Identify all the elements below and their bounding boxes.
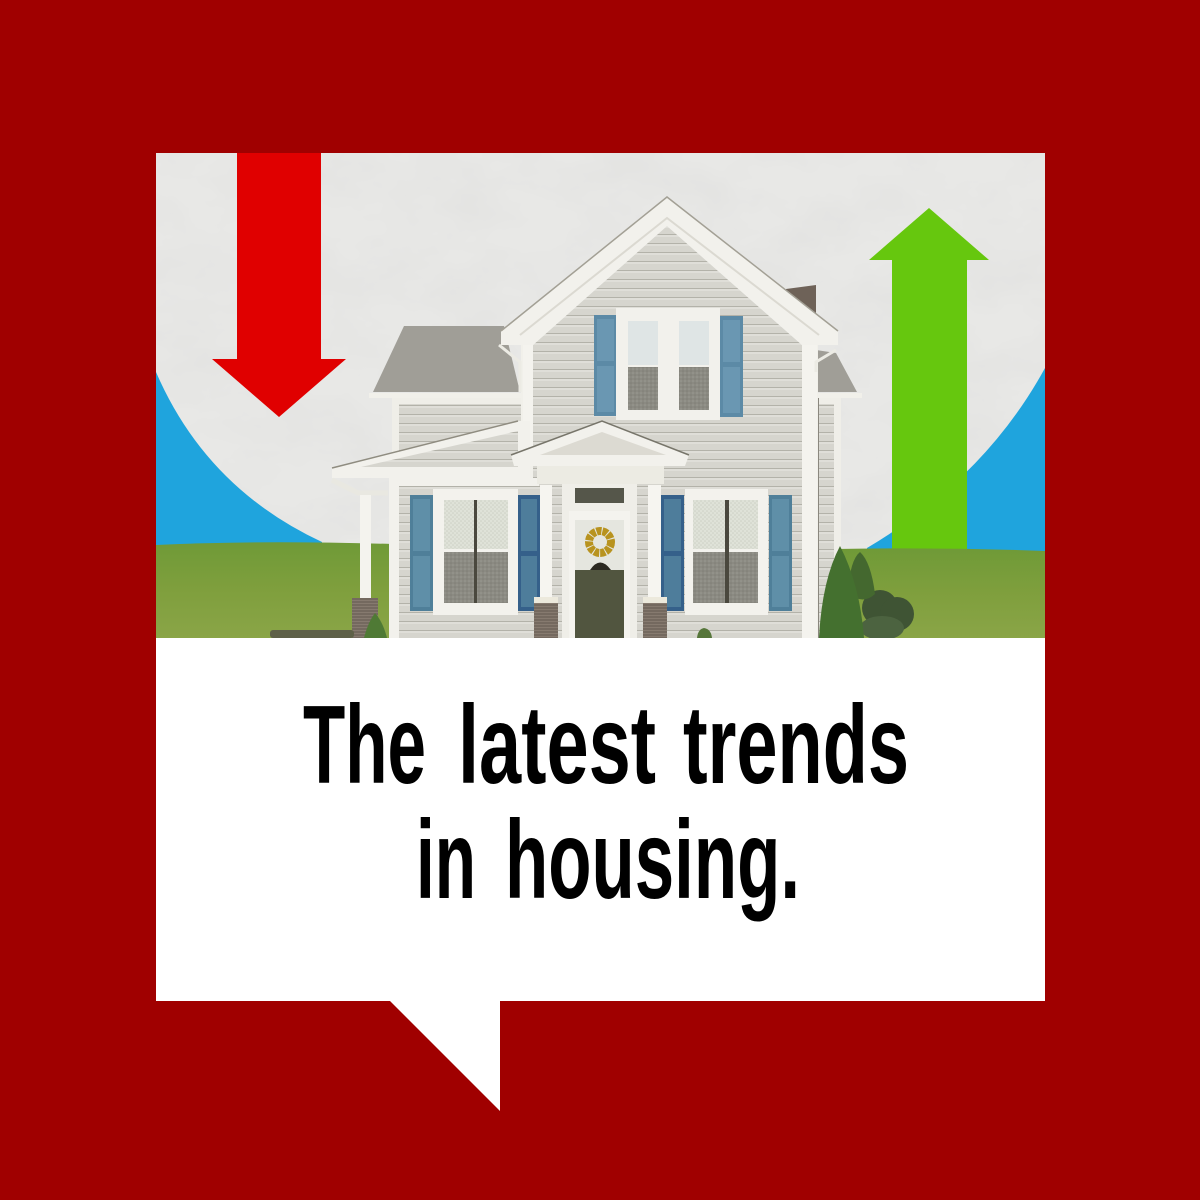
left upper wall bbox=[369, 393, 521, 450]
title line 1: The bbox=[303, 683, 426, 807]
icon: green up arrow bbox=[869, 208, 989, 550]
porch post bbox=[352, 495, 378, 638]
lower right shutter b bbox=[769, 495, 792, 611]
house bbox=[332, 197, 862, 638]
title line 1: trends bbox=[683, 683, 909, 807]
title line 1 bbox=[303, 683, 909, 807]
upper right shutter bbox=[720, 316, 743, 417]
icon: red down arrow bbox=[212, 153, 346, 417]
upper window group bbox=[594, 308, 743, 420]
upper right window bbox=[679, 321, 709, 410]
porch pediment bbox=[511, 421, 689, 484]
small left shrub bbox=[364, 613, 387, 638]
door glass bbox=[575, 520, 624, 570]
chimney bbox=[786, 285, 816, 313]
entry door assembly bbox=[562, 483, 637, 638]
icon: wreath bbox=[589, 531, 611, 553]
porch roof bbox=[332, 421, 530, 478]
tall cone shrub bbox=[819, 546, 864, 638]
title bbox=[303, 683, 909, 922]
blue curve left bbox=[156, 372, 322, 560]
lower left window group bbox=[410, 489, 540, 615]
transom window bbox=[575, 488, 624, 503]
lawn left bbox=[156, 542, 392, 638]
lower left shutter b bbox=[518, 495, 540, 611]
blue curve right bbox=[867, 368, 1045, 560]
right side roof bbox=[816, 350, 857, 392]
lower left wall bbox=[389, 478, 539, 638]
illustration: house scene bbox=[156, 153, 1045, 640]
rear cone shrub bbox=[848, 552, 875, 600]
upper window frame bbox=[616, 308, 720, 420]
door frame bbox=[569, 511, 630, 638]
low hedge bbox=[270, 630, 354, 638]
lower left shutter a bbox=[410, 495, 433, 611]
title line 2 bbox=[416, 798, 800, 922]
lower right window panes bbox=[693, 500, 758, 603]
main two-storey wall bbox=[521, 226, 818, 638]
upper left shutter bbox=[594, 315, 617, 416]
small centre shrub bbox=[697, 628, 712, 638]
upper left window bbox=[628, 321, 658, 410]
left side roof bbox=[373, 326, 520, 392]
lower right window group bbox=[661, 489, 792, 615]
porch column left bbox=[534, 485, 558, 638]
lower left window frame bbox=[433, 489, 518, 615]
gutter pieces bbox=[499, 345, 836, 392]
speech bubble panel bbox=[156, 153, 1045, 1111]
shrubs bbox=[270, 546, 914, 640]
corner boards bbox=[523, 345, 817, 638]
lower right shutter a bbox=[661, 495, 684, 611]
porch column right bbox=[643, 485, 667, 638]
lower left window panes bbox=[444, 500, 508, 603]
right side wall bbox=[816, 393, 862, 638]
round shrubs bbox=[860, 590, 914, 640]
title line 2: housing. bbox=[505, 798, 800, 922]
title line 2: in bbox=[416, 798, 476, 922]
main gable trim bbox=[501, 197, 838, 345]
lawn right bbox=[835, 548, 1045, 638]
title line 1: latest bbox=[458, 683, 656, 807]
lower right window frame bbox=[685, 489, 768, 615]
door panel bbox=[575, 570, 624, 638]
paper backdrop bbox=[156, 153, 1045, 549]
